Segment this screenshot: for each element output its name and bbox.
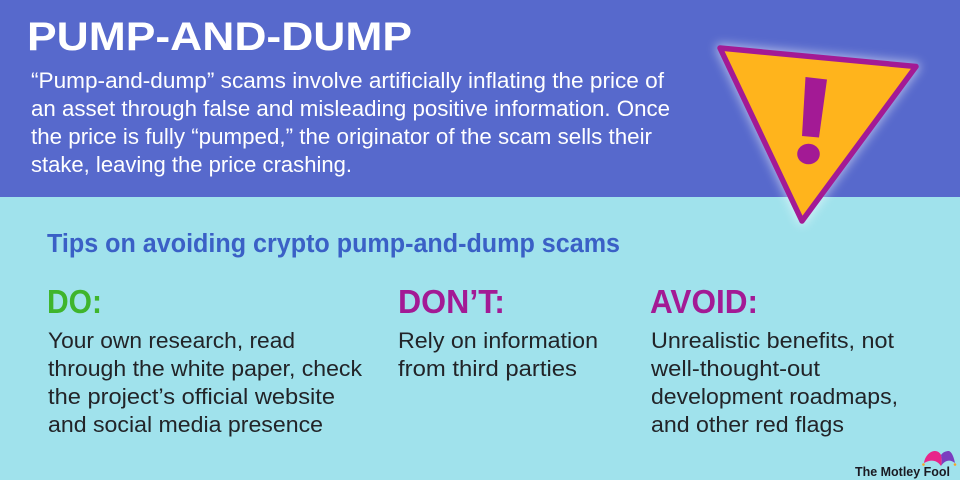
column: avoid: Unrealistic benefits, not [651, 328, 894, 353]
logo: The Motley Fool [855, 451, 956, 479]
column: don't: from third parties [398, 356, 577, 381]
column: avoid [650, 283, 898, 437]
heading: tips: Tips on avoiding crypto pump-and-dump scams [47, 230, 620, 258]
intro text block: the price is fully “pumped,” the originator of the scam sells their [31, 124, 652, 149]
column: don't [398, 283, 598, 381]
column: do: and social media presence [48, 412, 323, 437]
column: don't: DON’T: [398, 283, 505, 320]
logo: The Motley Fool: The Motley Fool [855, 464, 950, 479]
column: don't: Rely on information [398, 328, 598, 353]
column: do [47, 283, 363, 437]
column: do: through the white paper, check [48, 356, 363, 381]
icon: warning triangle [720, 48, 916, 221]
column: do: the project’s official website [48, 384, 335, 409]
panel: top header background [0, 0, 960, 197]
intro text block: an asset through false and misleading positive information. Once [31, 96, 670, 121]
intro text block: “Pump-and-dump” scams involve artificially inflating the price of [31, 68, 665, 93]
column: do: DO: [47, 283, 102, 320]
column: avoid: well-thought-out [650, 356, 820, 381]
panel: bottom background [0, 197, 960, 480]
column: do: Your own research, read [48, 328, 295, 353]
column: avoid: and other red flags [651, 412, 844, 437]
column: avoid: AVOID: [650, 283, 758, 320]
intro text block: stake, leaving the price crashing. [31, 152, 352, 177]
intro text block [31, 68, 670, 177]
title: PUMP-AND-DUMP [27, 15, 412, 59]
column: avoid: development roadmaps, [651, 384, 898, 409]
